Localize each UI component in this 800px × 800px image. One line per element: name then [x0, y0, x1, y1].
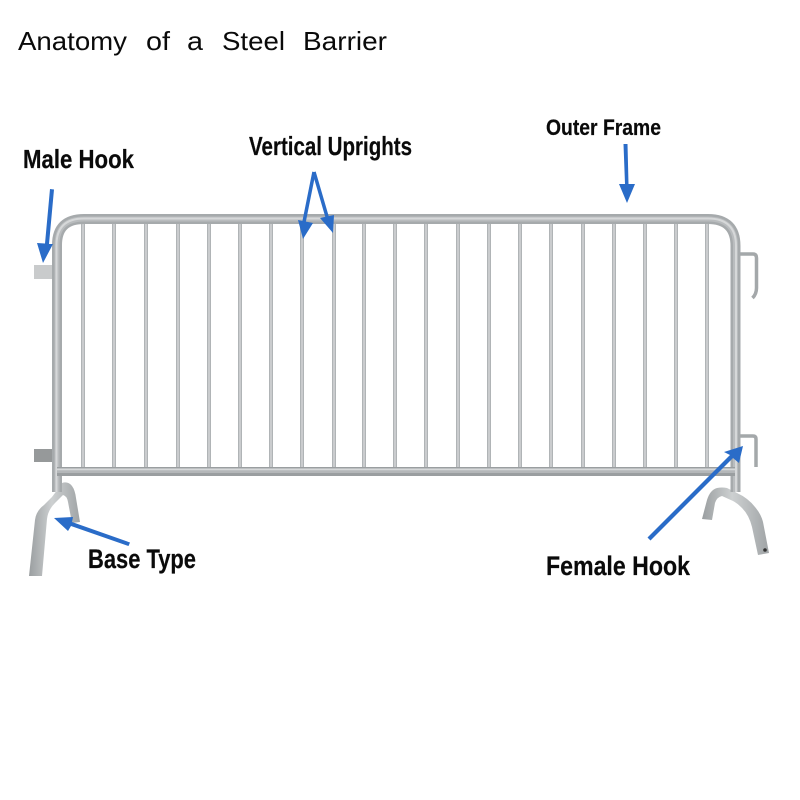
female hooks [740, 254, 756, 467]
vertical uprights [83, 222, 707, 468]
label: vertical uprights: Vertical Uprights [249, 131, 412, 161]
arrow: base type [54, 517, 130, 546]
title: Barrier [303, 26, 387, 56]
right base foot [702, 488, 769, 555]
barrier illustration [29, 218, 769, 576]
label: female hook: Female Hook [546, 551, 691, 581]
label: male hook: Male Hook [23, 144, 134, 174]
title: of [146, 26, 171, 56]
label: outer frame: Outer Frame [546, 115, 661, 140]
label: base type: Base Type [88, 544, 196, 574]
arrow: outer frame [619, 144, 635, 203]
male hooks [34, 265, 54, 462]
title: Steel [222, 26, 285, 56]
title: a [187, 26, 204, 56]
arrow: male hook [37, 189, 54, 263]
title [18, 26, 387, 56]
arrow: female hook [648, 446, 743, 540]
title: Anatomy [18, 26, 127, 56]
left base foot [29, 482, 80, 576]
arrows: vertical uprights [298, 172, 334, 239]
outer frame [56, 218, 736, 492]
